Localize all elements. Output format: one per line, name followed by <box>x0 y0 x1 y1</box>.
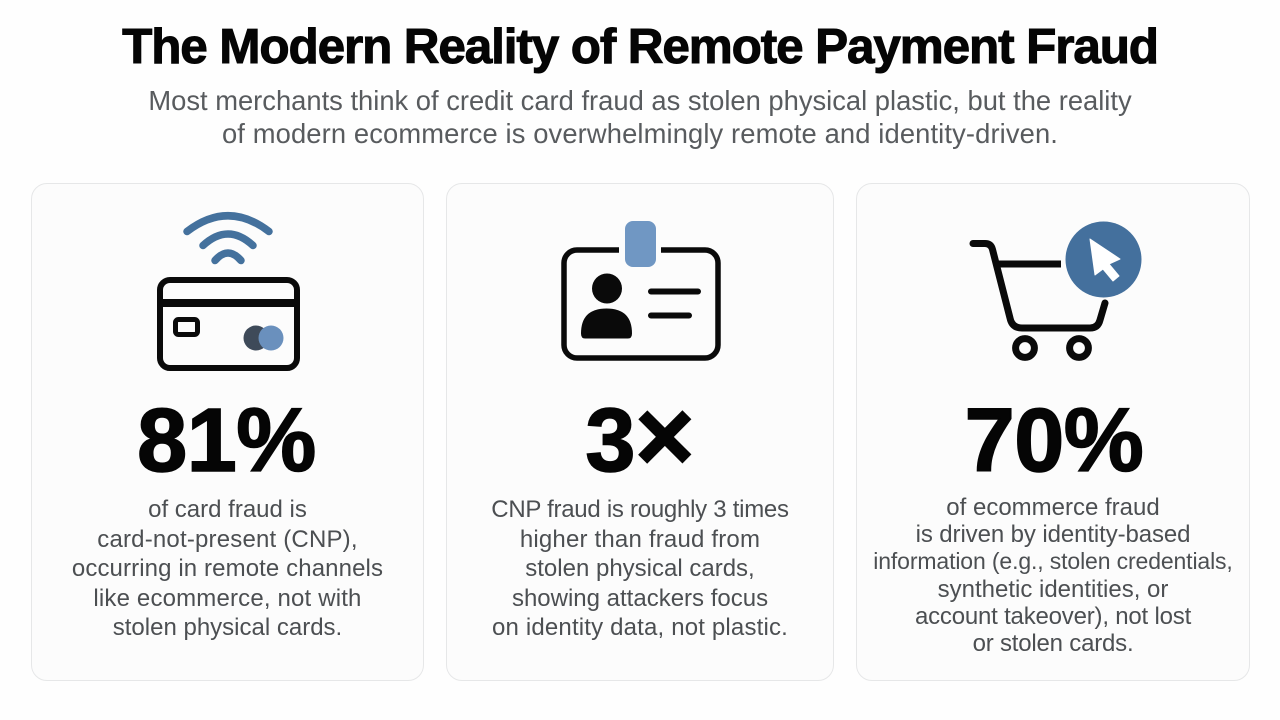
icon: contactless credit card <box>157 212 300 371</box>
statistic: 70%: 70% <box>965 391 1143 491</box>
description <box>873 494 1233 657</box>
description: card-not-present (CNP), <box>97 526 358 552</box>
description: showing attackers focus <box>512 584 768 612</box>
subtitle: Most merchants think of credit card fraud as stolen physical plastic, but the reality <box>148 85 1132 116</box>
icon: shopping cart with cursor <box>970 222 1142 361</box>
description: or stolen cards. <box>973 630 1133 657</box>
description: on identity data, not plastic. <box>492 614 788 641</box>
panel: 81% card-not-present <box>31 183 424 681</box>
description: is driven by identity-based <box>916 521 1190 548</box>
description: like ecommerce, not with <box>93 584 362 612</box>
description: of card fraud is <box>148 496 307 523</box>
statistic: 81%: 81% <box>137 391 316 491</box>
panel: 3x CNP fraud <box>446 183 834 681</box>
title: The Modern Reality of Remote Payment Fraud <box>122 19 1158 74</box>
subtitle: of modern ecommerce is overwhelmingly remote and identity-driven. <box>222 118 1058 148</box>
description: account takeover), not lost <box>915 603 1191 630</box>
description <box>72 496 383 641</box>
description: information (e.g., stolen credentials, <box>873 548 1233 574</box>
icon: identity badge <box>561 221 721 361</box>
description: of ecommerce fraud <box>946 494 1160 521</box>
description: higher than fraud from <box>520 526 760 552</box>
description: occurring in remote channels <box>72 555 383 582</box>
description: synthetic identities, or <box>938 576 1168 603</box>
description <box>491 496 789 641</box>
subtitle <box>148 85 1132 149</box>
description: CNP fraud is roughly 3 times <box>491 496 789 523</box>
description: stolen physical cards, <box>525 555 755 582</box>
panel: 70% identity-based <box>856 183 1250 681</box>
description: stolen physical cards. <box>113 614 342 641</box>
statistic: 3x: 3× <box>585 379 695 493</box>
